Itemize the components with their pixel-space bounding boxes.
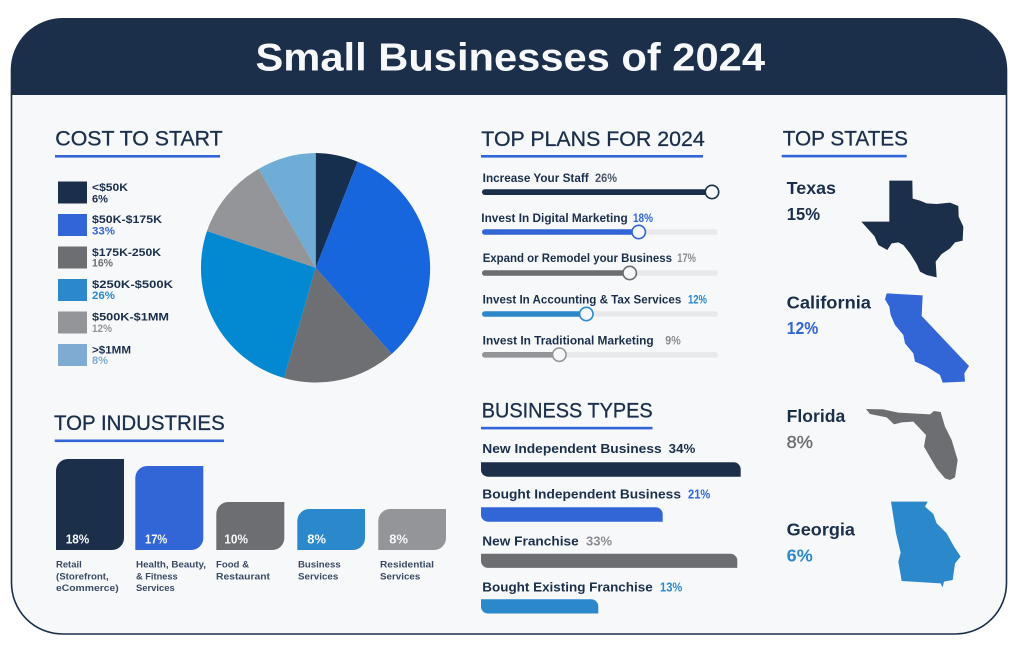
state: georgia: Georgia [787, 520, 855, 540]
state: california [787, 293, 969, 383]
slider: expand or remodel: 17% [677, 253, 696, 265]
bar: business services: 8% [307, 532, 326, 546]
bar: food and restaurant: 10% [224, 532, 248, 546]
panel: business types [481, 398, 741, 614]
legend: $250K-$500K [92, 279, 173, 291]
title: Small Businesses of 2024 [256, 36, 765, 80]
legend: $175K-250K [92, 247, 161, 259]
bar: health, beauty and fitness: & Fitness [136, 572, 178, 583]
bar: food and restaurant: Food & [216, 560, 249, 571]
slider: traditional marketing: Invest In Traditional Marketing [483, 335, 654, 347]
legend: 8% [92, 355, 108, 367]
state: texas [787, 178, 963, 277]
state: california: 12% [787, 318, 819, 338]
slider: accounting and tax: Invest In Accounting & Tax Services [483, 294, 681, 306]
bar: bought existing franchise: Bought Existing Franchise [482, 580, 653, 595]
heading: top states: TOP STATES [783, 126, 908, 150]
slider: digital marketing [481, 213, 718, 239]
slider: traditional marketing: 9% [665, 335, 681, 347]
bar: retail: 18% [66, 532, 90, 546]
legend: $50K-$175K [92, 214, 162, 226]
bar: residential services: Residential [380, 560, 434, 571]
state: florida: Florida [787, 406, 846, 426]
slider: increase your staff [482, 173, 719, 199]
bar: residential services: 8% [389, 532, 408, 546]
state: georgia [787, 502, 961, 587]
state: texas: 15% [787, 204, 820, 224]
panel: top industries [54, 411, 446, 594]
bar: retail: Retail [56, 560, 82, 571]
slider: digital marketing: 18% [633, 213, 653, 225]
legend: 26% [92, 290, 115, 302]
bar: residential services [378, 509, 446, 583]
bar: retail [56, 459, 124, 594]
legend: 16% [92, 258, 113, 270]
bar: business services [297, 509, 365, 583]
slider: digital marketing: Invest In Digital Marketing [481, 213, 628, 225]
bar: food and restaurant [216, 502, 284, 583]
bar: bought existing franchise [481, 580, 683, 614]
heading: business types: BUSINESS TYPES [482, 398, 653, 422]
slider: expand or remodel: Expand or Remodel your Business [483, 253, 672, 265]
slider: accounting and tax: 12% [688, 294, 707, 306]
icon: georgia map [891, 502, 961, 587]
slider: traditional marketing [482, 335, 718, 361]
heading: cost to start: COST TO START [55, 126, 223, 150]
heading: top industries: TOP INDUSTRIES [54, 411, 225, 435]
bar: new independent business [481, 441, 741, 477]
icon: texas map [861, 181, 963, 277]
heading: top plans: TOP PLANS FOR 2024 [481, 127, 705, 151]
panel: top states [782, 126, 969, 587]
state: florida [787, 406, 958, 480]
bar: new franchise: New Franchise [482, 533, 579, 548]
bar: new independent business: 34% [669, 441, 696, 456]
slider: expand or remodel [482, 253, 718, 280]
legend: 12% [92, 323, 112, 335]
header band [11, 18, 1007, 95]
bar: health, beauty and fitness [135, 466, 206, 594]
state: florida: 8% [787, 432, 813, 452]
bar: retail: (Storefront, [56, 572, 109, 583]
icon: florida map [866, 409, 958, 480]
panel: cost to start [55, 126, 430, 383]
state: california: California [787, 293, 871, 313]
bar: business services: Business [298, 560, 341, 571]
bar: new independent business: New Independent Business [482, 441, 662, 456]
bar: health, beauty and fitness: Health, Beauty, [136, 560, 206, 571]
slider: increase your staff: Increase Your Staff [483, 173, 589, 185]
bar: bought independent business: Bought Independent Business [482, 486, 681, 502]
bar: bought independent business: 21% [688, 486, 711, 502]
bar: new franchise [481, 533, 737, 568]
legend: 6% [92, 194, 108, 206]
legend: $500K-$1MM [92, 312, 169, 324]
state: georgia: 6% [787, 546, 813, 566]
bar: business services: Services [298, 572, 338, 583]
slider: accounting and tax [482, 294, 718, 321]
legend: >$1MM [92, 344, 131, 356]
state: texas: Texas [787, 178, 836, 198]
bar: new franchise: 33% [586, 533, 612, 548]
bar: health, beauty and fitness: 17% [145, 532, 168, 546]
slider: increase your staff: 26% [595, 173, 617, 185]
legend: <$50K [92, 182, 128, 194]
bar: bought independent business [481, 486, 711, 522]
bar: bought existing franchise: 13% [660, 580, 683, 595]
legend: 33% [92, 226, 115, 238]
pie chart [201, 153, 430, 383]
panel: top plans for 2024 [481, 127, 719, 361]
icon: california map [885, 293, 969, 383]
legend [58, 182, 173, 367]
bar: health, beauty and fitness: Services [136, 583, 175, 594]
bar: retail: eCommerce) [56, 583, 119, 594]
bar: food and restaurant: Restaurant [216, 572, 271, 583]
bar: residential services: Services [380, 572, 420, 583]
